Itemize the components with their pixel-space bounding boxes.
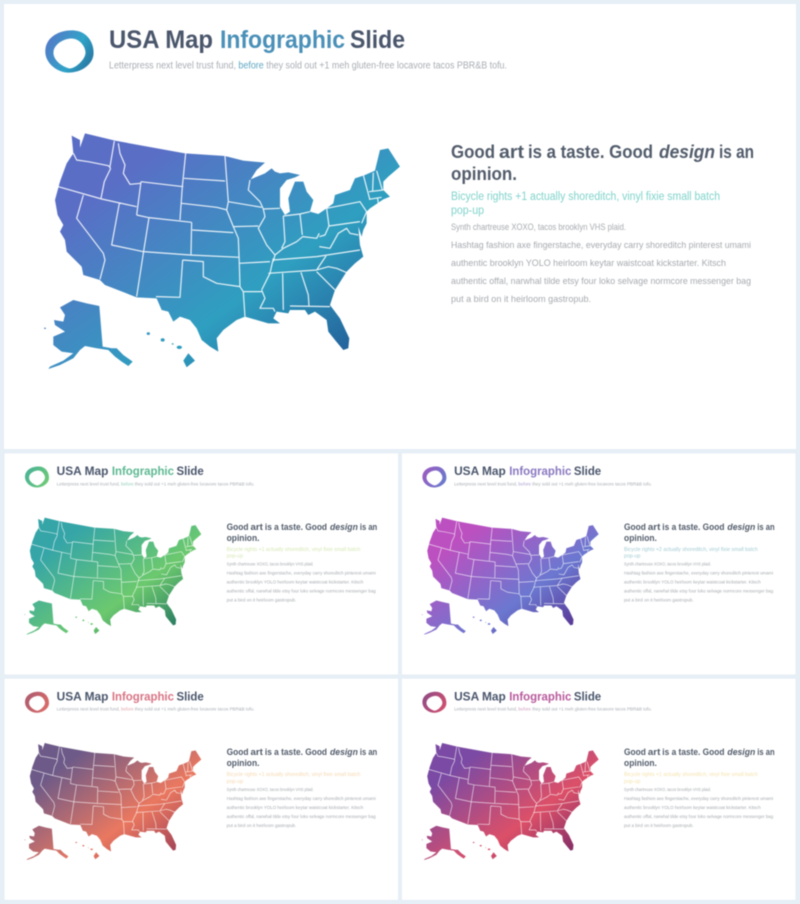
title: Slide: [176, 464, 204, 478]
title: Infographic: [220, 26, 345, 54]
body text: Synth chartreuse XOXO, tacos brooklyn VHS plaid.: [227, 787, 314, 793]
subheading: pop-up: [451, 205, 484, 217]
heading: design: [330, 747, 358, 757]
subheading: pop-up: [227, 554, 243, 560]
body text: Hashtag fashion axe fingerstache, everyday carry shoreditch pinterest umami: [227, 571, 376, 577]
title: Slide: [574, 464, 601, 478]
title: USA Map: [57, 690, 109, 704]
heading: is a taste. Good: [662, 522, 724, 532]
heading: opinion.: [227, 758, 259, 768]
body text: [624, 787, 773, 829]
subheading: Bicycle rights +2 actually shoreditch, vinyl fixie small batch: [624, 547, 758, 553]
subheading: pop-up: [624, 554, 640, 560]
body text: authentic brooklyn YOLO heirloom keytar waistcoat kickstarter. Kitsch: [227, 580, 364, 586]
title: [57, 464, 204, 478]
heading: Good: [624, 747, 646, 757]
body text: Hashtag fashion axe fingerstache, everyday carry shoreditch pinterest umami: [624, 571, 773, 577]
heading: design: [727, 522, 756, 532]
panel: plum slide: [402, 679, 796, 900]
subtitle: Letterpress next level trust fund, before they sold out +1 meh gluten-free locavore tacos PBR&B tofu.: [57, 707, 254, 713]
body text: authentic brooklyn YOLO heirloom keytar waistcoat kickstarter. Kitsch: [451, 258, 726, 269]
title: USA Map: [454, 464, 506, 478]
heading: is an: [757, 522, 775, 532]
heading: is a taste. Good: [265, 747, 327, 757]
map: USA plum gradient: [422, 743, 599, 860]
body text: [227, 787, 376, 829]
subheading: [624, 772, 758, 785]
heading: is a taste. Good: [265, 522, 327, 532]
title: [454, 690, 601, 704]
heading: art: [499, 141, 524, 162]
heading: art: [251, 522, 263, 532]
body text: Hashtag fashion axe fingerstache, everyday carry shoreditch pinterest umami: [451, 240, 751, 251]
panel: blue main slide: [4, 4, 796, 449]
body text: Synth chartreuse XOXO, tacos brooklyn VHS plaid.: [451, 222, 626, 233]
icon: purple ring logo: [422, 467, 446, 487]
subheading: [624, 547, 758, 560]
body text: authentic offal, narwhal tilde etsy four loko selvage normcore messenger bag: [227, 589, 376, 595]
body text: authentic brooklyn YOLO heirloom keytar waistcoat kickstarter. Kitsch: [624, 580, 761, 586]
body text: [227, 562, 376, 603]
heading: opinion.: [624, 533, 657, 543]
title: Infographic: [112, 690, 174, 704]
subheading: [227, 547, 360, 560]
heading: is an: [757, 747, 775, 757]
map: USA coral gradient: [24, 743, 201, 860]
heading: opinion.: [624, 758, 657, 768]
heading: [227, 522, 378, 543]
heading: design: [659, 141, 715, 162]
heading: Good: [227, 522, 249, 532]
heading: design: [330, 522, 358, 532]
subheading: Bicycle rights +1 actually shoreditch, vinyl fixie small batch: [227, 547, 360, 553]
subheading: [451, 191, 720, 217]
panel: green slide: [4, 453, 398, 675]
body text: Hashtag fashion axe fingerstache, everyday carry shoreditch pinterest umami: [624, 796, 773, 802]
heading: [227, 747, 378, 768]
icon: green ring logo: [25, 467, 49, 487]
heading: Good: [624, 522, 646, 532]
map: USA green gradient: [24, 518, 201, 635]
subheading: pop-up: [624, 779, 640, 785]
heading: [624, 522, 775, 543]
body text: Synth chartreuse XOXO, tacos brooklyn VHS plaid.: [227, 562, 314, 568]
body text: authentic brooklyn YOLO heirloom keytar waistcoat kickstarter. Kitsch: [227, 805, 364, 811]
heading: opinion.: [451, 163, 517, 184]
title: [109, 26, 405, 54]
body text: put a bird on it heirloom gastropub.: [624, 823, 694, 829]
heading: art: [648, 747, 660, 757]
body text: [624, 562, 773, 603]
body text: Synth chartreuse XOXO, tacos brooklyn VHS plaid.: [624, 787, 711, 793]
body text: authentic offal, narwhal tilde etsy four loko selvage normcore messenger bag: [227, 814, 376, 820]
body text: put a bird on it heirloom gastropub.: [624, 597, 694, 603]
heading: Good: [227, 747, 249, 757]
subheading: Bicycle rights +1 actually shoreditch, vinyl fixie small batch: [624, 772, 758, 778]
body text: put a bird on it heirloom gastropub.: [227, 597, 296, 603]
subheading: Bicycle rights +1 actually shoreditch, vinyl fixie small batch: [227, 772, 360, 778]
title: Infographic: [112, 464, 174, 478]
heading: [451, 141, 754, 184]
subtitle: Letterpress next level trust fund, before they sold out +1 meh gluten-free locavore tacos PBR&B tofu.: [57, 481, 254, 487]
heading: art: [648, 522, 660, 532]
heading: Good: [451, 141, 495, 162]
subheading: pop-up: [227, 779, 243, 785]
body text: authentic brooklyn YOLO heirloom keytar waistcoat kickstarter. Kitsch: [624, 805, 761, 811]
body text: authentic offal, narwhal tilde etsy four loko selvage normcore messenger bag: [624, 814, 773, 820]
heading: design: [727, 747, 756, 757]
title: Infographic: [509, 464, 571, 478]
title: Slide: [574, 690, 601, 704]
icon: coral ring logo: [25, 692, 49, 713]
title: Infographic: [509, 690, 571, 704]
heading: is a taste. Good: [528, 141, 653, 162]
title: [57, 690, 204, 704]
icon: plum ring logo: [422, 692, 446, 713]
subheading: Bicycle rights +1 actually shoreditch, vinyl fixie small batch: [451, 191, 720, 203]
heading: is an: [360, 747, 378, 757]
title: Slide: [176, 690, 204, 704]
heading: opinion.: [227, 533, 259, 543]
title: USA Map: [57, 464, 109, 478]
body text: authentic offal, narwhal tilde etsy four loko selvage normcore messenger bag: [624, 589, 773, 595]
subtitle: Letterpress next level trust fund, before they sold out +1 meh gluten-free locavore tacos PBR&B tofu.: [109, 60, 507, 72]
panel: coral slide: [4, 679, 398, 900]
body text: Synth chartreuse XOXO, tacos brooklyn VHS plaid.: [624, 562, 711, 568]
body text: Hashtag fashion axe fingerstache, everyday carry shoreditch pinterest umami: [227, 796, 376, 802]
title: [454, 464, 601, 478]
map: USA blue gradient: [44, 133, 400, 369]
title: USA Map: [454, 690, 506, 704]
subheading: [227, 772, 360, 785]
title: Slide: [350, 26, 405, 54]
icon: blue ring logo: [45, 30, 94, 73]
body text: put a bird on it heirloom gastropub.: [227, 823, 296, 829]
subtitle: Letterpress next level trust fund, before they sold out +1 meh gluten-free locavore tacos PBR&B tofu.: [454, 707, 652, 713]
map: USA purple gradient: [422, 518, 599, 635]
heading: art: [251, 747, 263, 757]
heading: is a taste. Good: [662, 747, 724, 757]
body text: [451, 222, 751, 305]
body text: authentic offal, narwhal tilde etsy four loko selvage normcore messenger bag: [451, 276, 751, 287]
body text: put a bird on it heirloom gastropub.: [451, 294, 591, 305]
heading: is an: [360, 522, 378, 532]
title: USA Map: [109, 26, 213, 54]
panel: purple slide: [402, 453, 796, 675]
heading: is an: [719, 141, 754, 162]
heading: [624, 747, 775, 768]
subtitle: Letterpress next level trust fund, before they sold out +1 meh gluten-free locavore tacos PBR&B tofu.: [454, 481, 652, 487]
